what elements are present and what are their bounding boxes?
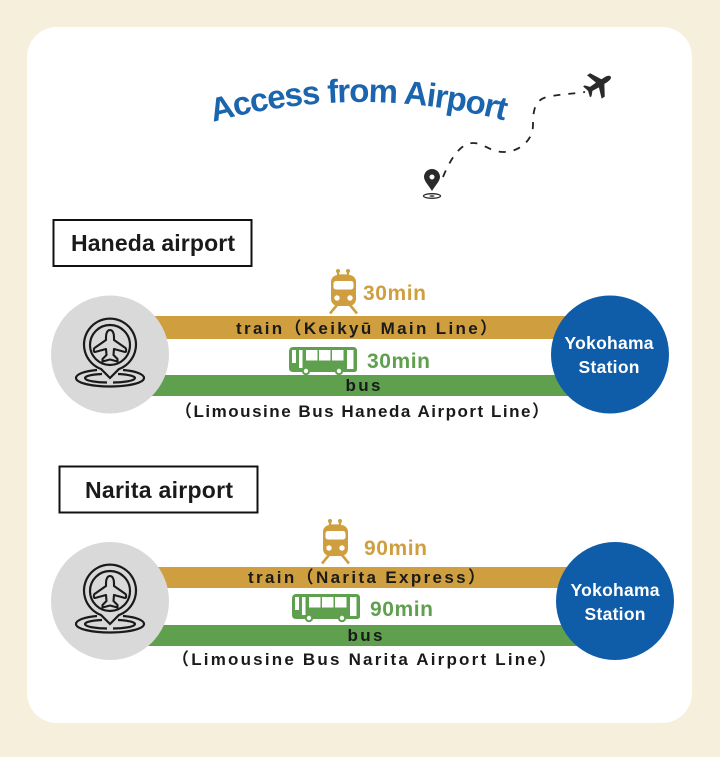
bus bar	[145, 625, 580, 646]
destination: Yokohama Station	[551, 296, 669, 414]
dashed flight route	[443, 92, 585, 177]
train bar	[150, 316, 575, 339]
bus label: bus	[348, 626, 382, 645]
icon: airplane	[579, 65, 618, 104]
icon: location pin	[424, 169, 440, 198]
heading: Haneda airport: Haneda airport	[71, 230, 235, 256]
destination: Yokohama Station: Station	[584, 604, 646, 624]
icon: bus	[289, 347, 357, 374]
train time: 90min	[364, 537, 427, 560]
heading: Narita airport: Narita airport	[85, 477, 233, 503]
destination: Yokohama Station: Yokohama	[570, 580, 660, 600]
destination: Yokohama Station: Station	[578, 357, 640, 377]
train label: train（Keikyū Main Line）	[236, 319, 497, 338]
icon: airport pin	[76, 319, 144, 386]
bus time: 90min	[370, 598, 433, 621]
train time: 30min	[363, 282, 426, 305]
train label: train（Narita Express）	[248, 568, 485, 587]
bus time: 30min	[367, 350, 430, 373]
bus line name: （Limousine Bus Narita Airport Line）	[172, 650, 556, 669]
bus bar	[150, 375, 575, 396]
icon: bus	[292, 594, 360, 621]
train bar	[150, 567, 580, 588]
panel: Narita airport	[51, 466, 674, 669]
origin circle	[51, 296, 169, 414]
bus label: bus	[346, 376, 380, 395]
heading: Haneda airport	[54, 220, 252, 266]
destination: Yokohama Station: Yokohama	[564, 333, 654, 353]
bus line name: （Limousine Bus Haneda Airport Line）	[175, 402, 549, 421]
icon: train	[330, 269, 357, 314]
title: Access from Airport	[214, 78, 508, 122]
icon: train	[322, 519, 349, 564]
destination: Yokohama Station	[556, 542, 674, 660]
origin circle	[51, 542, 169, 660]
panel: Haneda airport	[51, 220, 669, 421]
icon: airport pin	[76, 565, 144, 632]
heading: Narita airport	[60, 466, 258, 512]
